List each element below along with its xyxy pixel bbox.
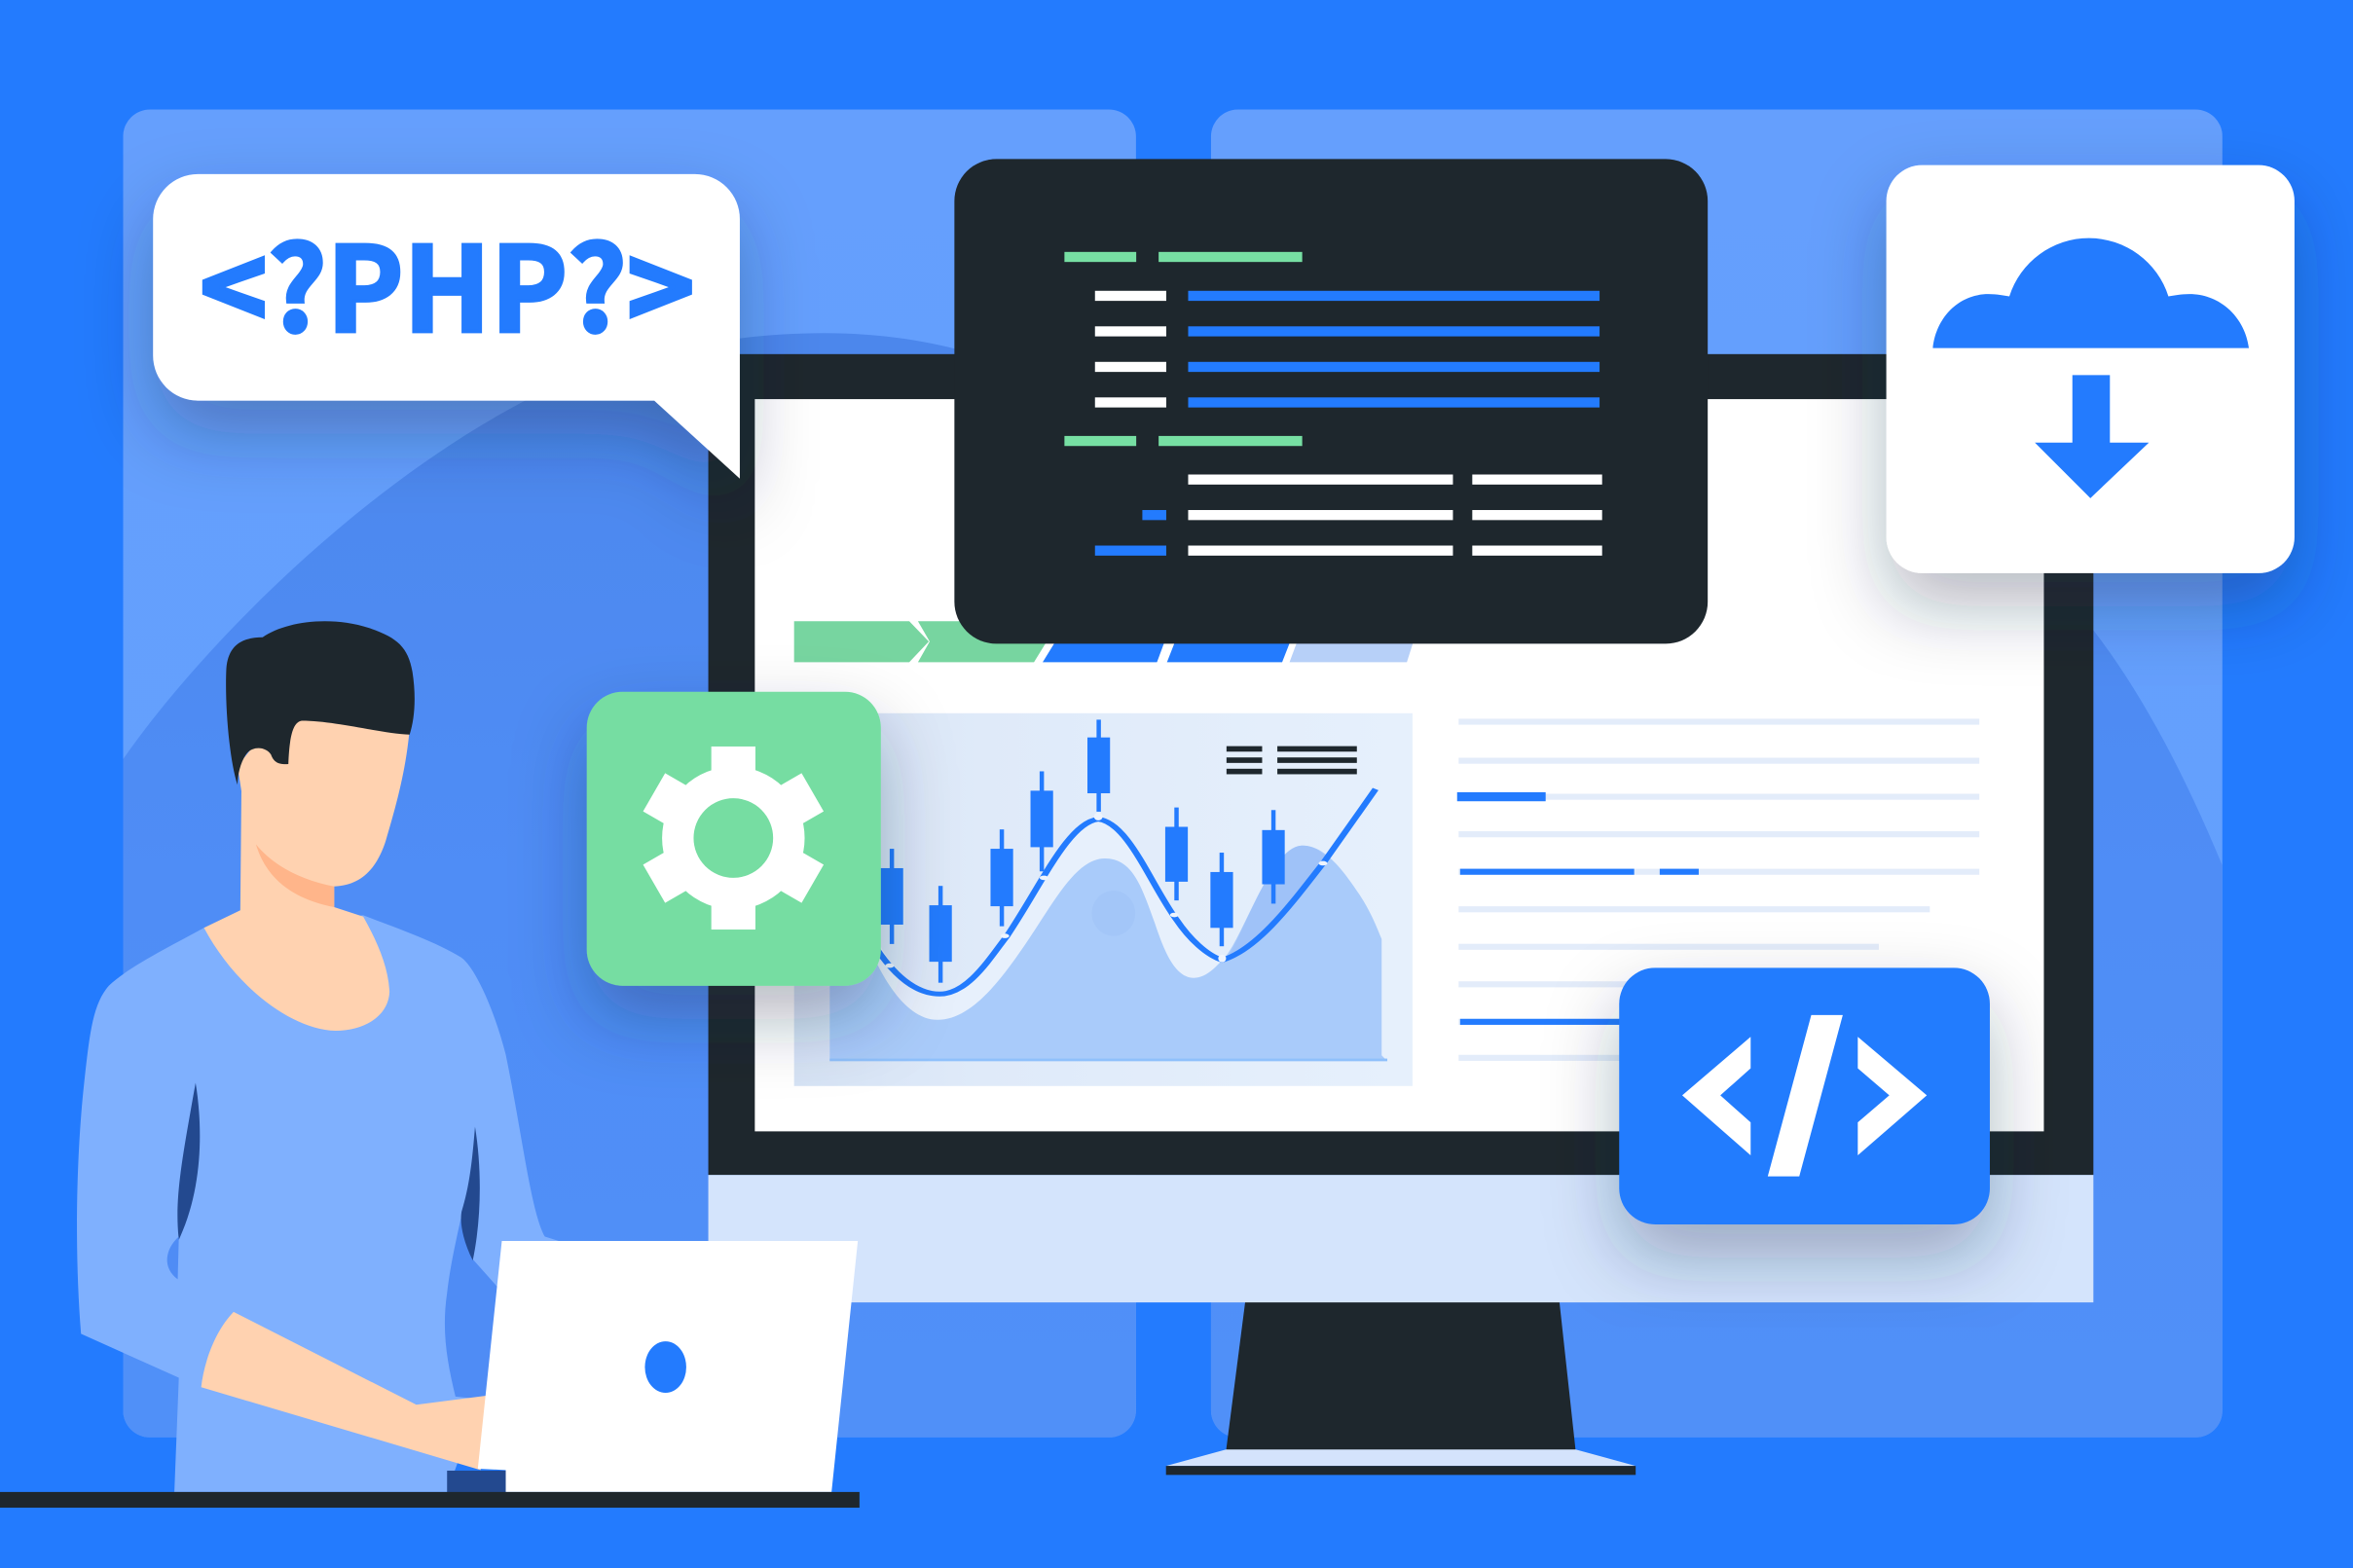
monitor stand — [1166, 1299, 1636, 1475]
shirt shadow folds — [177, 1083, 200, 1240]
chart: candlesticks and area — [794, 713, 1413, 1086]
icon: code tag — [1682, 1015, 1927, 1177]
head and neck — [204, 703, 414, 1031]
monitor — [709, 354, 2093, 1475]
code editor panel — [954, 159, 1708, 643]
area — [829, 846, 1387, 1061]
chart legend — [1227, 747, 1357, 774]
forearm — [202, 1312, 489, 1470]
person with laptop — [0, 621, 860, 1508]
cloud download card — [1887, 165, 2295, 573]
chart background — [794, 713, 1413, 1086]
shirt — [77, 915, 559, 1492]
monitor frame — [709, 354, 2093, 1175]
arm gap — [445, 1218, 497, 1400]
background panels with arc — [123, 110, 2224, 1438]
progress chevrons — [794, 621, 1420, 662]
screen text lines — [1457, 718, 1979, 1061]
icon: gear — [643, 747, 824, 930]
laptop — [447, 1241, 858, 1493]
hair — [226, 621, 415, 784]
settings gear card — [587, 692, 881, 986]
speech bubble: PHP: <?PHP?> — [200, 197, 695, 366]
speech bubble: PHP — [153, 174, 740, 479]
trend line — [877, 789, 1376, 994]
band under line — [829, 820, 1324, 1061]
icon: download arrow — [2035, 375, 2149, 498]
icon: cloud — [1932, 238, 2249, 348]
monitor screen — [754, 399, 2043, 1131]
code lines — [1064, 252, 1602, 556]
monitor chin — [709, 1175, 2093, 1302]
candles — [881, 719, 1285, 983]
neck shadow — [256, 845, 334, 907]
code tag card — [1619, 967, 1990, 1224]
desk — [0, 1492, 860, 1508]
